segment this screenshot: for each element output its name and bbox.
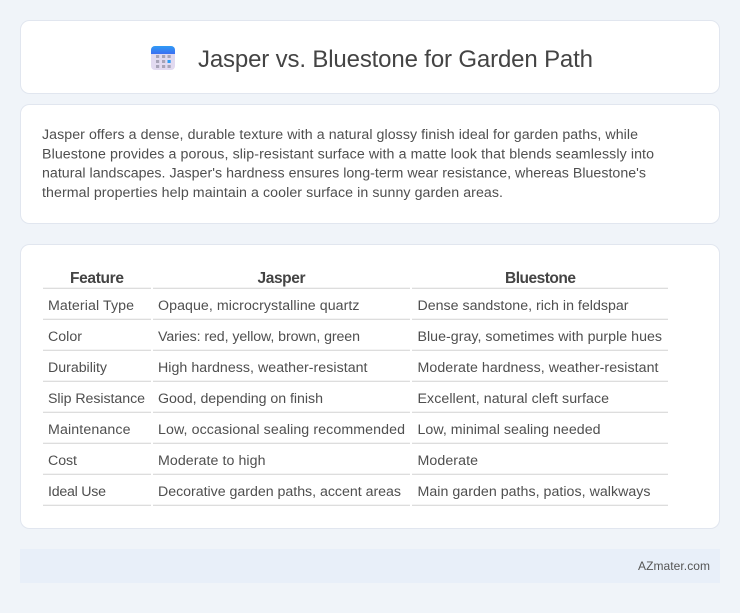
row: material type: [48, 298, 629, 314]
row: ideal use: Main garden paths, patios, walkways: [418, 484, 650, 500]
summary paragraph: thermal properties help maintain a cooler surface in sunny garden areas.: [42, 185, 503, 201]
footer bar: [20, 549, 720, 583]
table header row: Bluestone: [505, 270, 576, 287]
row: cost: Moderate to high: [158, 453, 266, 469]
icon: calendar: [151, 46, 175, 70]
row: maintenance: Low, minimal sealing needed: [418, 422, 600, 438]
summary paragraph: Jasper offers a dense, durable texture with a natural glossy finish ideal for garden paths, while: [42, 127, 638, 143]
row: slip resistance: [48, 391, 609, 407]
row: material type: Opaque, microcrystalline quartz: [158, 298, 360, 314]
footer credit: AZmater.com: [638, 559, 710, 573]
row: color: Varies: red, yellow, brown, green: [158, 329, 360, 345]
row: color: Color: [48, 329, 82, 345]
table header row: Jasper: [258, 270, 306, 287]
summary paragraph: Bluestone provides a porous, slip-resistant surface with a matte look that blends seamlessly into: [42, 146, 654, 162]
panel: comparison table: [20, 244, 720, 528]
table header row: Feature: [70, 270, 124, 287]
summary paragraph: natural landscapes. Jasper's hardness ensures long-term wear resistance, whereas Bluestone's: [42, 166, 646, 182]
title: Jasper vs. Bluestone for Garden Path: [198, 46, 593, 73]
row: maintenance: [48, 422, 600, 438]
row: cost: [48, 453, 478, 469]
row: ideal use: Ideal Use: [48, 484, 106, 500]
row: color: Blue-gray, sometimes with purple hues: [418, 329, 662, 345]
summary paragraph: [42, 127, 654, 201]
row: cost: Moderate: [418, 453, 478, 469]
row: material type: Material Type: [48, 298, 134, 314]
row: maintenance: Maintenance: [48, 422, 131, 438]
row: slip resistance: Good, depending on finish: [158, 391, 323, 407]
row: slip resistance: Excellent, natural cleft surface: [418, 391, 609, 407]
row: slip resistance: Slip Resistance: [48, 391, 145, 407]
row: durability: High hardness, weather-resistant: [158, 360, 368, 376]
panel: title header: [20, 20, 720, 94]
row: material type: Dense sandstone, rich in feldspar: [418, 298, 629, 314]
row: durability: Durability: [48, 360, 108, 376]
panel: summary text: [20, 104, 720, 224]
row: durability: [48, 360, 659, 376]
row: cost: Cost: [48, 453, 77, 469]
row: color: [48, 329, 662, 345]
row: durability: Moderate hardness, weather-resistant: [418, 360, 659, 376]
row: ideal use: [48, 484, 650, 500]
row: ideal use: Decorative garden paths, accent areas: [158, 484, 401, 500]
row: maintenance: Low, occasional sealing recommended: [158, 422, 405, 438]
table header row: [70, 270, 576, 287]
